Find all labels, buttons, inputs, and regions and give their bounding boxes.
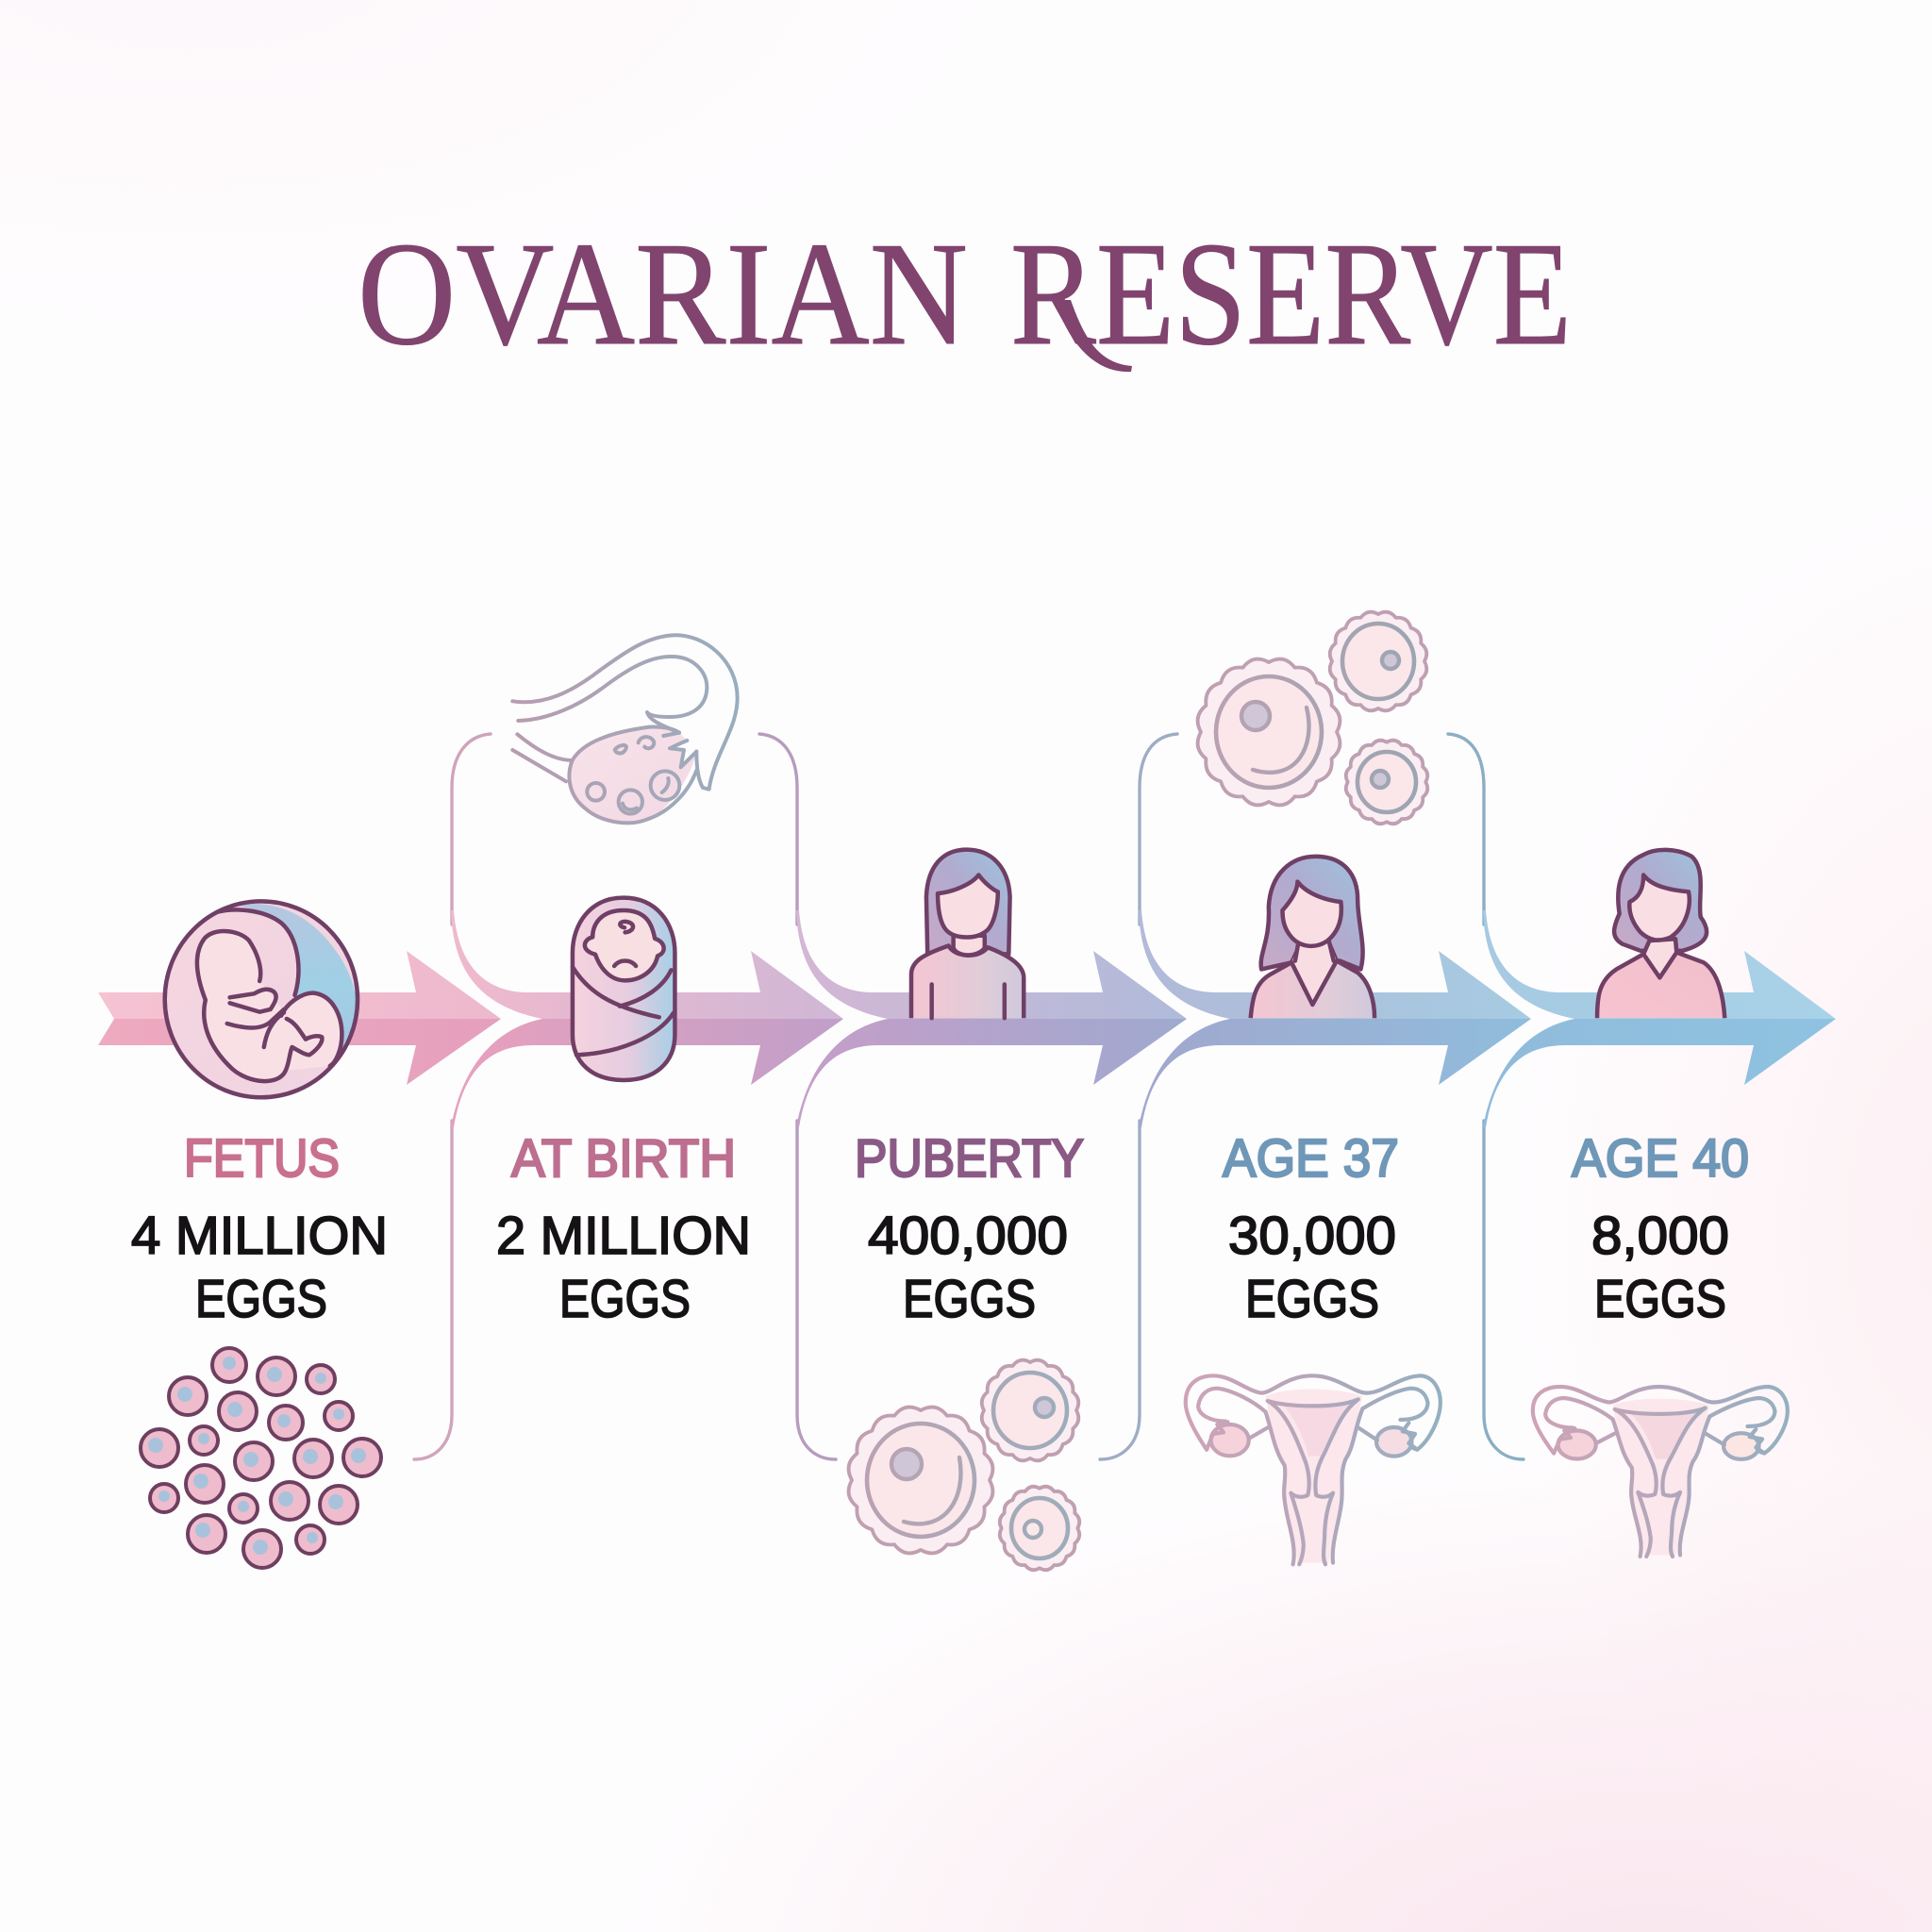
- stage label: puberty: [855, 1128, 1084, 1329]
- icon: swaddled baby: [573, 898, 675, 1080]
- stage label: age 40: EGGS: [1594, 1269, 1726, 1329]
- stage label: age 40: 8,000: [1591, 1206, 1729, 1266]
- stage label: age 37: [1223, 1128, 1399, 1329]
- stage label: fetus: 4 MILLION: [131, 1206, 388, 1266]
- icon: ovary and fallopian tube: [512, 635, 738, 823]
- icon: puberty girl: [911, 850, 1024, 1018]
- stage label: fetus: [131, 1128, 388, 1329]
- icon: three egg cells, bottom: [849, 1360, 1079, 1570]
- icon: reproductive system, age 37: [1186, 1375, 1441, 1564]
- arrow: puberty stage: [796, 910, 1187, 1127]
- title: RESERVE: [1010, 211, 1572, 375]
- arrow: at birth stage: [451, 910, 843, 1127]
- icon: fetus in womb: [165, 901, 358, 1097]
- stage label: age 40: [1572, 1128, 1749, 1329]
- stage label: fetus: FETUS: [184, 1128, 340, 1189]
- icon: three egg cells, top: [1198, 612, 1427, 824]
- title: OVARIAN: [358, 211, 968, 375]
- title: [358, 211, 1572, 375]
- stage label: at birth: 2 MILLION: [496, 1206, 751, 1266]
- stage label: at birth: [496, 1128, 751, 1329]
- stage label: age 37: AGE 37: [1223, 1128, 1399, 1189]
- icon: woman age 40: [1597, 850, 1724, 1018]
- stage label: age 37: 30,000: [1228, 1206, 1396, 1266]
- arrow: age 40 stage: [1483, 910, 1836, 1127]
- icon: woman age 37: [1251, 857, 1374, 1018]
- stage label: at birth: AT BIRTH: [511, 1128, 736, 1189]
- stage label: fetus: EGGS: [195, 1269, 327, 1329]
- arrow: age 37 stage: [1139, 910, 1531, 1127]
- stage label: puberty: EGGS: [903, 1269, 1036, 1329]
- stage label: puberty: PUBERTY: [855, 1128, 1084, 1189]
- stage label: age 37: EGGS: [1245, 1269, 1379, 1329]
- arrow: fetus stage: [98, 951, 501, 1085]
- connector brackets: [414, 734, 1524, 1459]
- icon: cluster of many eggs: [141, 1348, 381, 1568]
- icon: reproductive system, age 40: [1533, 1387, 1788, 1557]
- stage label: at birth: EGGS: [559, 1269, 691, 1329]
- stage label: puberty: 400,000: [868, 1206, 1068, 1266]
- stage label: age 40: AGE 40: [1572, 1128, 1749, 1189]
